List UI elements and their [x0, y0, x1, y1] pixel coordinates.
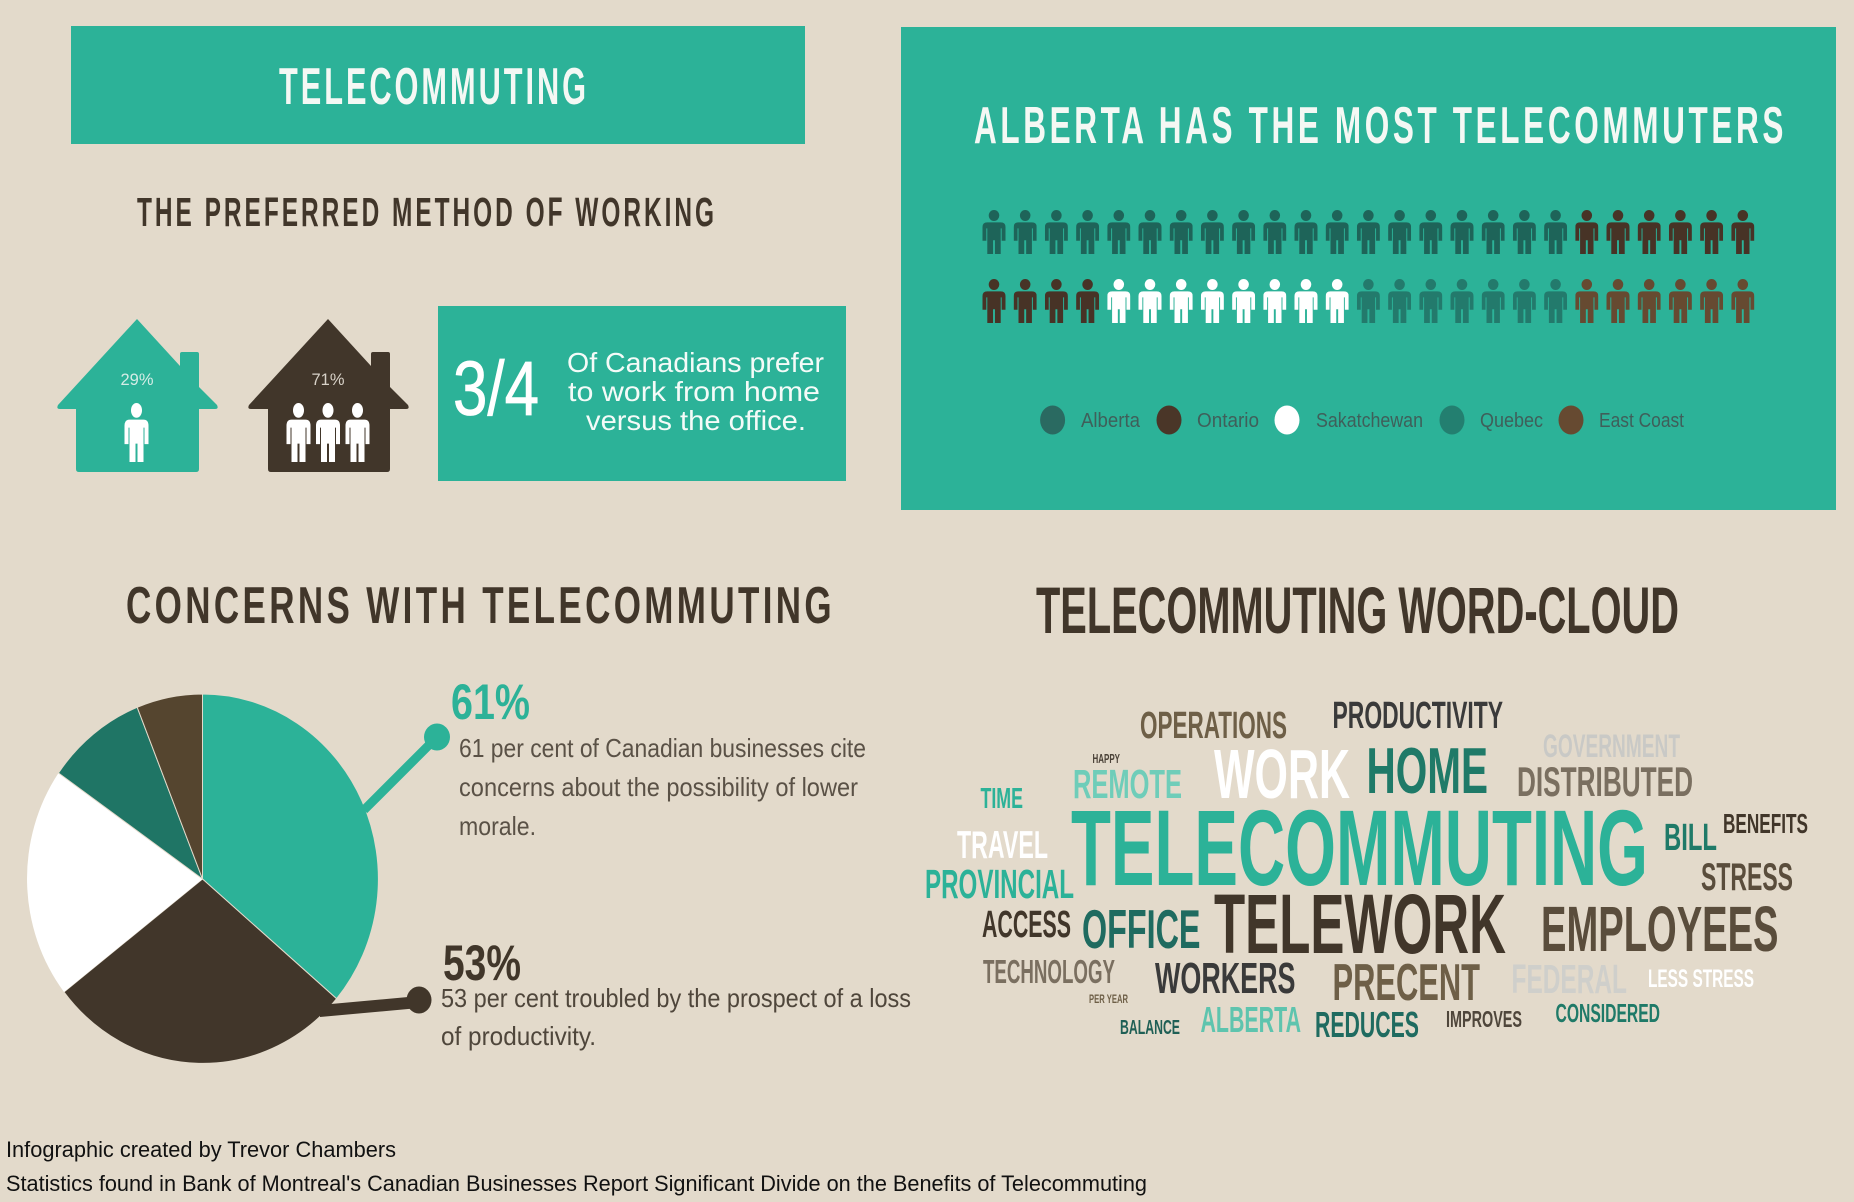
callout: 53 percent: 53%: [443, 935, 521, 991]
title: telecommuting: TELECOMMUTING: [279, 58, 589, 116]
word cloud: CONSIDERED: [1556, 998, 1660, 1028]
word cloud: GOVERNMENT: [1543, 728, 1680, 764]
legend: Ontario: [1197, 410, 1259, 432]
icon: teal house 29%: [57, 319, 218, 472]
word cloud: FEDERAL: [1512, 956, 1627, 1002]
callout: 61 percent: concerns about the possibility of lower: [459, 772, 858, 802]
word cloud: TELEWORK: [1214, 877, 1506, 971]
callout: 61 percent: 61%: [451, 674, 530, 730]
word cloud: HOME: [1366, 734, 1488, 807]
panel: telecommuting title banner: [71, 26, 805, 144]
people row 2: [982, 279, 1754, 323]
word cloud: BALANCE: [1120, 1017, 1180, 1039]
callout: 53 percent: 53 per cent troubled by the prospect of a loss: [441, 983, 911, 1013]
word cloud: REMOTE: [1073, 761, 1182, 807]
word cloud: ACCESS: [982, 904, 1071, 946]
word cloud: WORKERS: [1155, 954, 1296, 1003]
callout text: to work from home: [568, 376, 820, 407]
icon: dark house 71%: [248, 319, 409, 472]
panel: three quarters callout: [438, 306, 846, 481]
legend: [1040, 406, 1684, 434]
callout: 53 percent: of productivity.: [441, 1021, 596, 1051]
legend: Sakatchewan: [1316, 410, 1423, 432]
callout: 61 percent: 61 per cent of Canadian businesses cite: [459, 733, 866, 763]
word cloud: OPERATIONS: [1140, 705, 1287, 747]
word cloud: HAPPY: [1092, 751, 1120, 766]
callout text: versus the office.: [586, 405, 806, 436]
heading: preferred method: THE PREFERRED METHOD OF WORKING: [137, 189, 717, 235]
word cloud: OFFICE: [1082, 898, 1200, 960]
footer credits: Infographic created by Trevor Chambers: [6, 1137, 396, 1162]
word cloud: TRAVEL: [957, 824, 1048, 867]
word cloud: PRECENT: [1332, 954, 1480, 1012]
panel: alberta has the most telecommuters: [901, 27, 1836, 510]
word cloud: TIME: [980, 783, 1023, 815]
footer credits: [6, 1137, 1147, 1196]
word cloud: DISTRIBUTED: [1517, 758, 1693, 805]
legend: Alberta: [1081, 410, 1141, 432]
icon: teal house 29%: 29%: [120, 370, 154, 389]
pie chart: [27, 694, 378, 1063]
legend: East Coast: [1599, 410, 1684, 432]
callout text: Of Canadians prefer: [567, 347, 824, 378]
people row 1: [982, 210, 1754, 254]
word cloud: STRESS: [1701, 856, 1793, 899]
word cloud: REDUCES: [1315, 1004, 1419, 1045]
icon: dark house 71%: 71%: [312, 370, 344, 389]
word cloud: TECHNOLOGY: [983, 953, 1115, 990]
word cloud: BILL: [1664, 817, 1717, 859]
word cloud: PROVINCIAL: [925, 861, 1074, 907]
word cloud: WORK: [1214, 735, 1350, 813]
legend: Quebec: [1480, 410, 1543, 432]
callout: 61 percent: [364, 674, 866, 841]
word cloud: ALBERTA: [1200, 999, 1301, 1040]
heading: concerns: CONCERNS WITH TELECOMMUTING: [126, 577, 835, 635]
big fraction: 3/4: [453, 346, 539, 432]
footer credits: Statistics found in Bank of Montreal's Canadian Businesses Report Significant Divide on the Benefits of Telecommuting: [6, 1171, 1147, 1196]
callout: 61 percent: morale.: [459, 811, 536, 841]
word cloud: PRODUCTIVITY: [1332, 695, 1503, 737]
callout text: [567, 347, 824, 436]
word cloud: LESS STRESS: [1648, 965, 1754, 993]
word cloud: [925, 695, 1808, 1045]
word cloud: IMPROVES: [1446, 1006, 1522, 1032]
word cloud: PER YEAR: [1089, 992, 1128, 1006]
callout: 53 percent: [320, 935, 911, 1051]
